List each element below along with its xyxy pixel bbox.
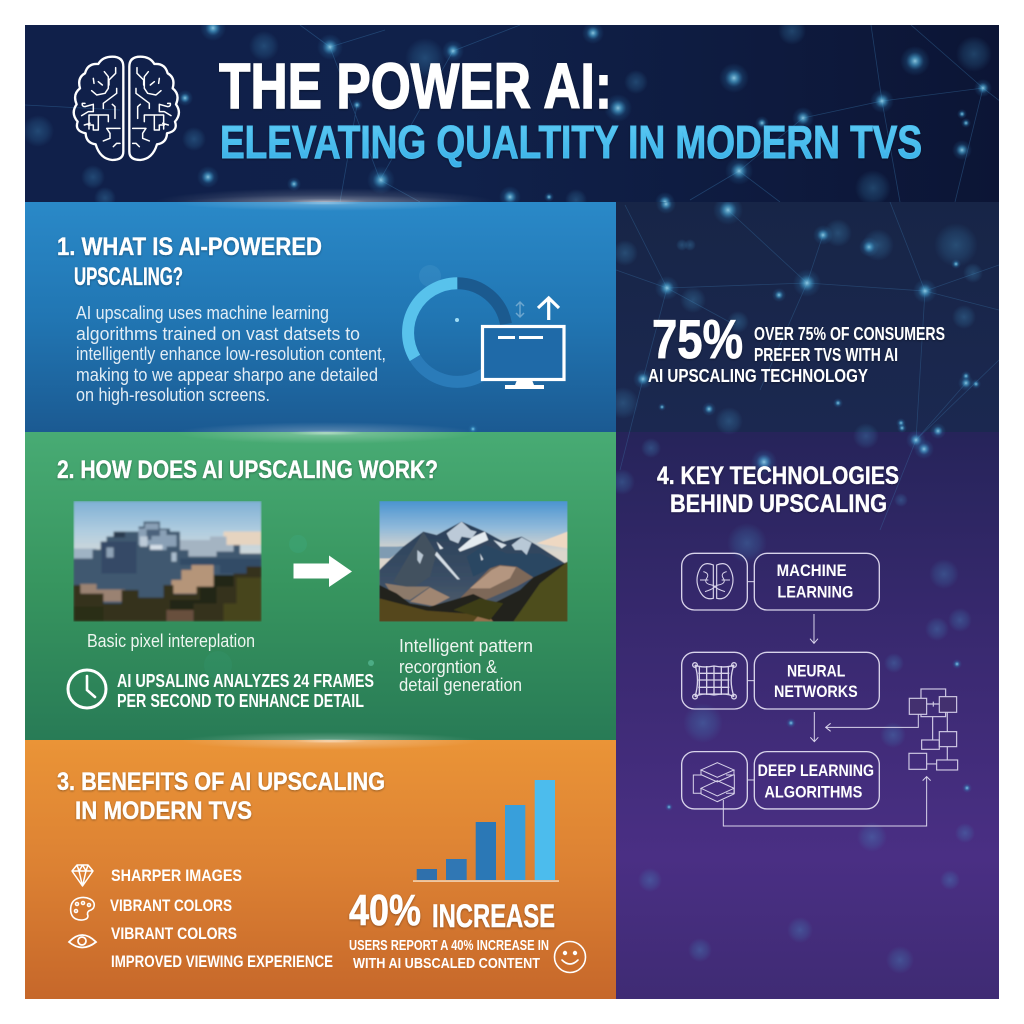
title: THE POWER AI: <box>219 50 612 122</box>
icon: palette <box>71 897 94 920</box>
box: deep learning label <box>747 752 879 809</box>
heading 3: 3. BENEFITS OF AI UPSCALING <box>57 768 385 796</box>
text block: upscaling description: AI upscaling uses machine learning <box>76 303 329 323</box>
text block: users report: WITH AI UBSCALED CONTENT <box>353 955 540 972</box>
caption: basic interpolation: Basic pixel intereplation <box>87 631 255 651</box>
heading 4: 4. KEY TECHNOLOGIES <box>657 462 899 490</box>
image: sharp mountain <box>379 501 568 622</box>
heading 1 <box>57 233 322 291</box>
box: neural networks label: NEURAL <box>787 661 845 680</box>
box: neural networks label: NETWORKS <box>774 682 858 701</box>
box: deep learning icon <box>682 752 747 809</box>
chart: upscaling donut <box>408 283 506 382</box>
heading 4: BEHIND UPSCALING <box>670 490 887 518</box>
text block: upscaling description: making to we appear sharpo ane detailed <box>76 365 378 385</box>
heading 1: UPSCALING? <box>74 263 183 291</box>
panel: right column background <box>607 194 999 999</box>
heading 4 <box>657 462 899 518</box>
benefit: improved viewing experience: IMPROVED VIEWING EXPERIENCE <box>111 952 333 971</box>
caption: intelligent pattern: detail generation <box>399 675 522 695</box>
diagram: circuit block <box>909 689 958 770</box>
stat: 75 percent of consumers: PREFER TVS WITH AI <box>754 345 898 365</box>
box: deep learning label: DEEP LEARNING <box>758 761 874 780</box>
stat: 40% increase <box>349 886 555 935</box>
box: neural networks icon <box>682 652 747 709</box>
title <box>219 50 922 168</box>
box: neural networks label <box>747 652 879 709</box>
stat: 75 percent of consumers: OVER 75% OF CONSUMERS <box>754 324 945 344</box>
panel: 3 benefits of AI upscaling <box>25 732 616 999</box>
box: deep learning label: ALGORITHMS <box>764 782 862 801</box>
benefit: sharper images: SHARPER IMAGES <box>111 866 242 885</box>
stat: 40% increase: 40% <box>349 886 421 935</box>
benefit: vibrant colors repeated: VIBRANT COLORS <box>111 924 237 943</box>
icon: smiley <box>554 942 586 972</box>
stat: 24 frames per second: AI UPSALING ANALYZES 24 FRAMES <box>117 671 374 691</box>
text block: upscaling description: intelligently enhance low-resolution content, <box>76 344 386 364</box>
panel: header <box>25 25 999 202</box>
stat: 75 percent of consumers <box>648 308 945 386</box>
text block: upscaling description: on high-resolution screens. <box>76 385 270 405</box>
icon: brain <box>74 57 179 160</box>
box: machine learning label: LEARNING <box>777 582 853 601</box>
box: machine learning label <box>747 553 879 610</box>
text block: users report: USERS REPORT A 40% INCREASE IN <box>349 937 549 954</box>
stat: 75 percent of consumers: AI UPSCALING TECHNOLOGY <box>648 366 868 386</box>
stat: 24 frames per second: PER SECOND TO ENHANCE DETAIL <box>117 691 364 711</box>
arrow: machine learning to neural networks <box>810 614 818 643</box>
stat: 75 percent of consumers: 75% <box>652 308 743 370</box>
stat: 40% increase: INCREASE <box>432 898 555 934</box>
caption: intelligent pattern: Intelligent pattern <box>399 636 533 656</box>
heading 3: IN MODERN TVS <box>75 797 252 825</box>
icon: clock <box>68 670 106 708</box>
panel: 1 what is AI-powered upscaling <box>25 195 616 434</box>
box: machine learning label: MACHINE <box>777 561 847 580</box>
diagram: key technologies flow <box>682 553 958 826</box>
icon: diamond <box>72 865 93 886</box>
heading 1: 1. WHAT IS AI-POWERED <box>57 233 322 261</box>
stat: 24 frames per second <box>117 671 374 711</box>
icon: monitor with upward arrows <box>482 298 564 389</box>
panel: 2 how does AI upscaling work <box>25 422 616 740</box>
heading 2: 2. HOW DOES AI UPSCALING WORK? <box>57 456 438 484</box>
text block: upscaling description <box>76 303 386 405</box>
text block: users report <box>349 937 549 972</box>
arrow: deep learning to circuit <box>723 777 931 826</box>
text block: upscaling description: algorithms trained on vast datsets to <box>76 324 360 344</box>
arrow: before to after <box>294 556 352 587</box>
heading 3 <box>57 768 385 825</box>
box: machine learning icon <box>682 553 747 610</box>
caption: intelligent pattern: recorgntion & <box>399 657 497 677</box>
benefit: vibrant colors: VIBRANT COLORS <box>110 896 232 915</box>
arrow: circuit to flow <box>826 714 918 731</box>
image: pixelated mountain <box>73 501 262 622</box>
bar chart: increase <box>413 780 559 882</box>
icon: eye <box>69 935 96 948</box>
caption: intelligent pattern <box>399 636 533 695</box>
arrow: neural networks to deep learning <box>810 712 818 742</box>
